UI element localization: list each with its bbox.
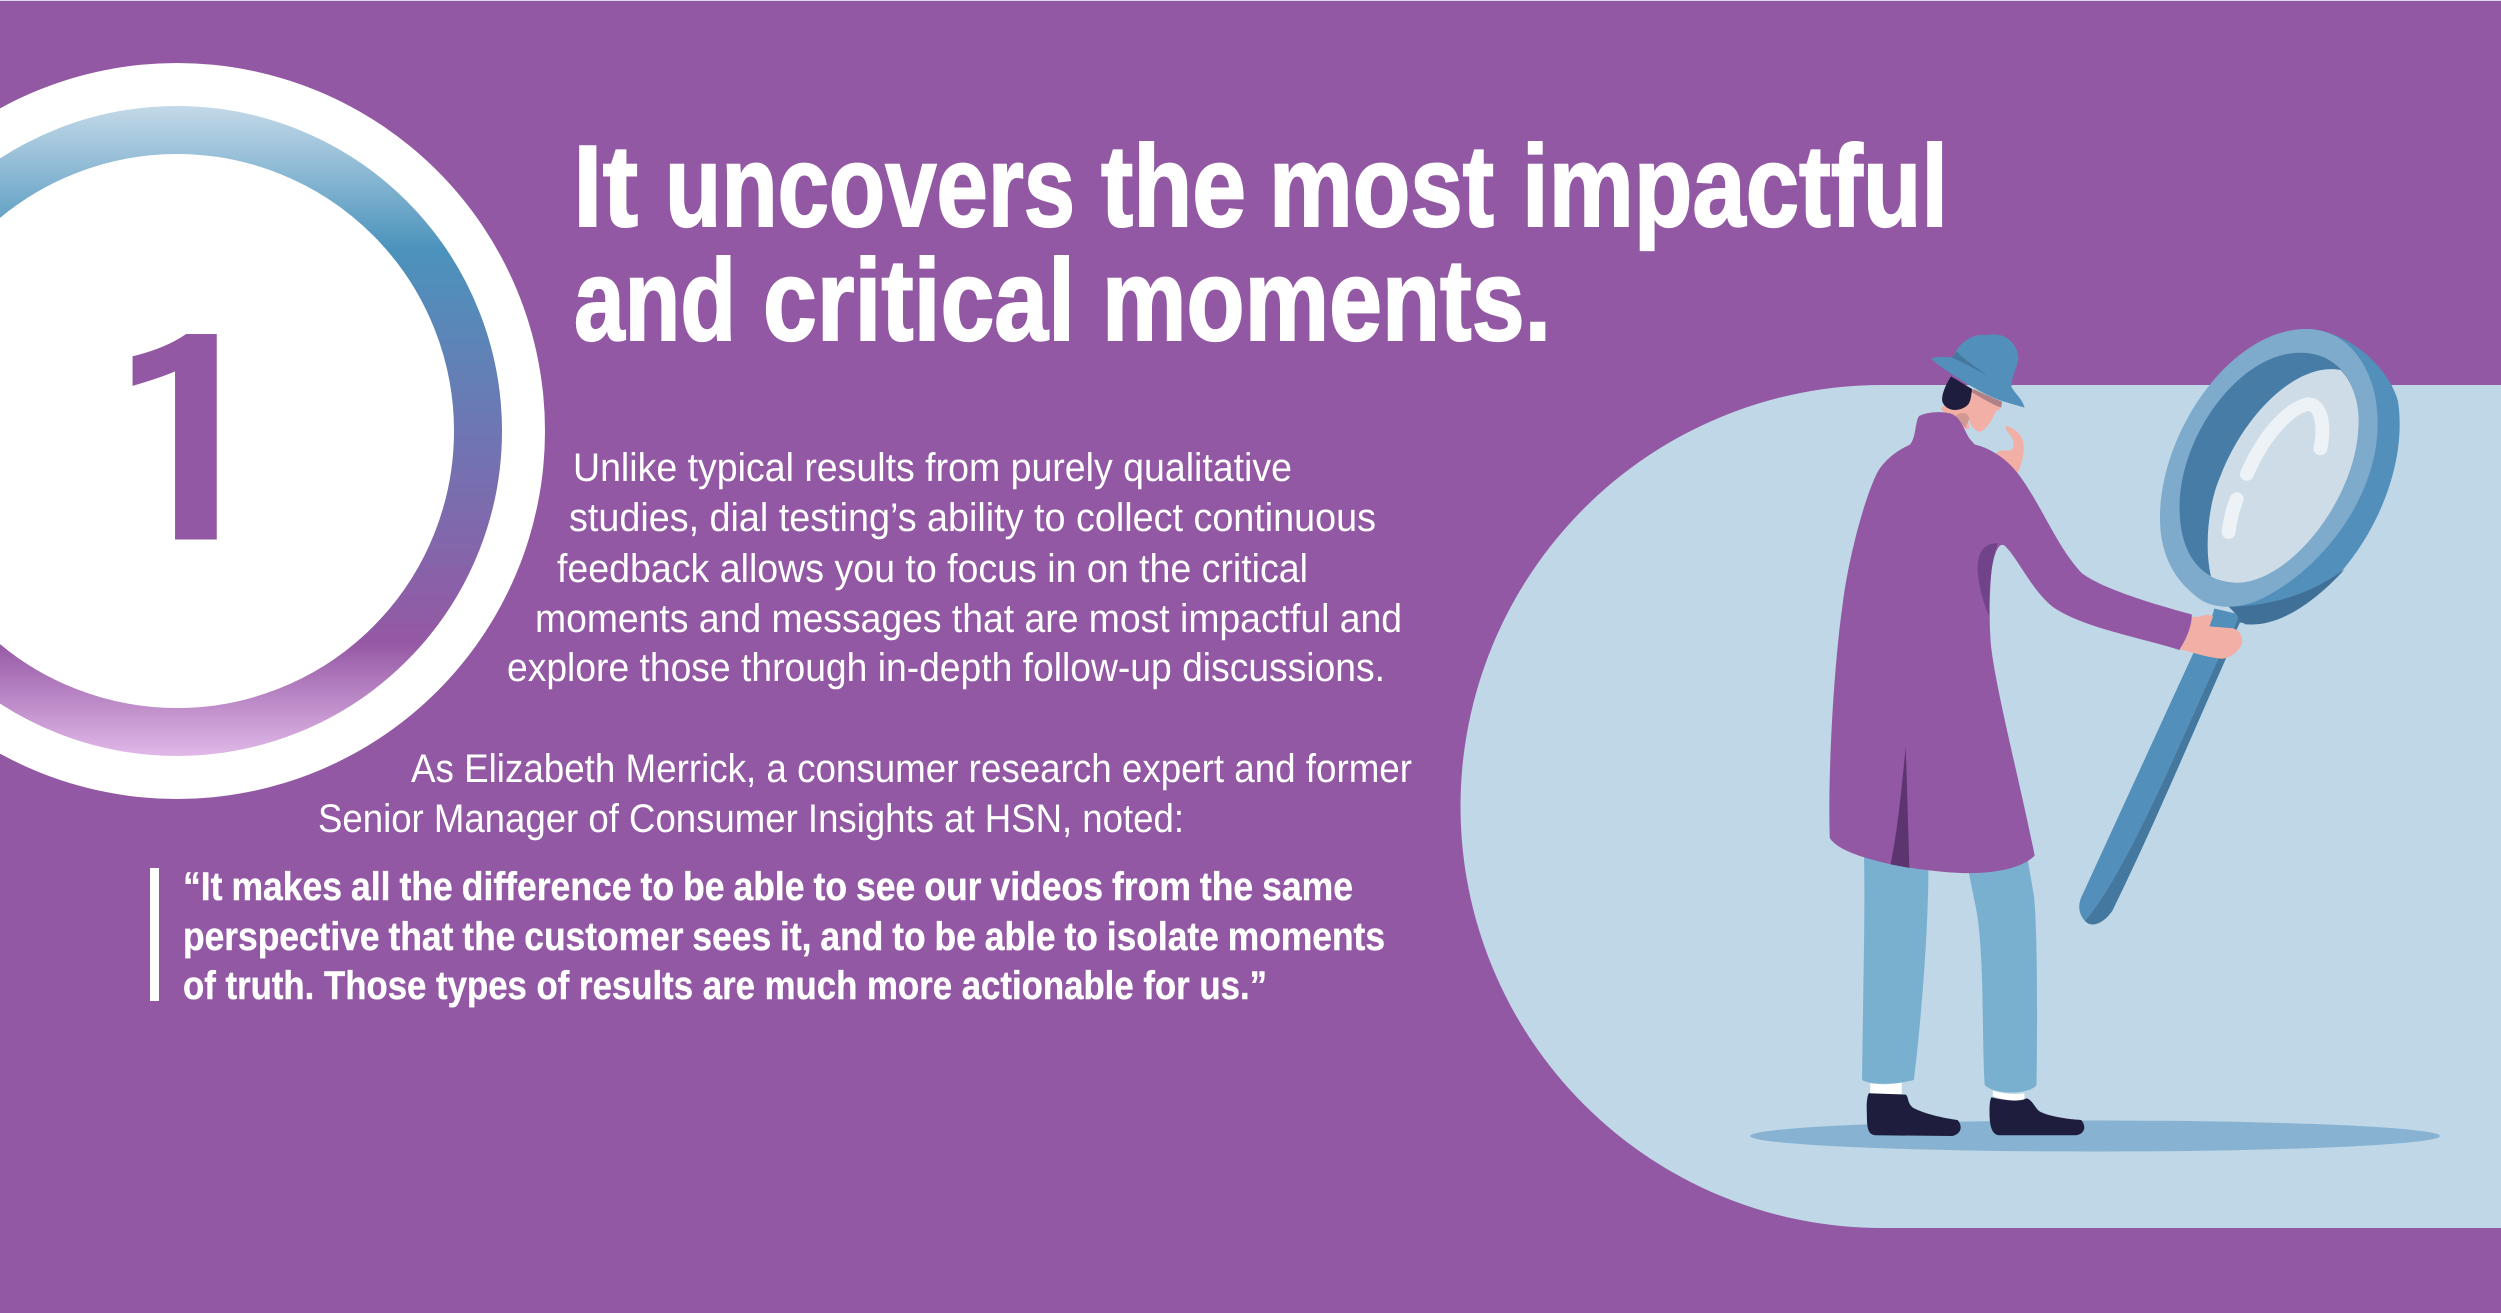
number badge [0, 63, 545, 799]
title: moments. [1102, 235, 1551, 365]
quote text: perspective that the customer sees it, and to be able to isolate moments [183, 915, 1385, 959]
title: most [1269, 121, 1494, 251]
title: the [1101, 121, 1246, 251]
head [1931, 334, 2024, 474]
quote text: “It makes all the difference to be able to see our videos from the same [183, 865, 1353, 909]
body paragraph: Unlike typical results from purely qualitative [573, 446, 1292, 490]
attribution text [318, 747, 1412, 841]
quote bar [150, 868, 159, 1001]
title: It [573, 121, 638, 251]
body paragraph: explore those through in-depth follow-up discussions. [507, 646, 1385, 690]
body paragraph: feedback allows you to focus in on the critical [557, 547, 1308, 591]
title: uncovers [665, 121, 1075, 251]
title: and [574, 235, 736, 365]
panel: light blue rounded backdrop [1460, 385, 2501, 1228]
magnifier handle [2079, 609, 2243, 925]
title: impactful [1522, 121, 1948, 251]
figure and magnifying glass [1829, 329, 2400, 925]
badge: white disc [0, 63, 545, 799]
attribution text: Senior Manager of Consumer Insights at HSN, noted: [318, 797, 1184, 841]
magnifier head [2160, 329, 2400, 625]
coat [1829, 412, 2192, 873]
badge: numeral 1: 1 [89, 301, 291, 586]
attribution text: As Elizabeth Merrick, a consumer research expert and former [411, 747, 1412, 791]
title [573, 121, 1948, 365]
quote text: of truth. Those types of results are much more actionable for us.” [183, 964, 1267, 1008]
body paragraph [507, 446, 1402, 690]
title: critical [763, 235, 1075, 365]
quote text [183, 865, 1385, 1008]
hand gripping handle [2180, 614, 2242, 659]
body paragraph: studies, dial testing’s ability to collect continuous [569, 496, 1376, 540]
legs and shoes [1862, 857, 2084, 1136]
body paragraph: moments and messages that are most impactful and [535, 597, 1402, 641]
illustration: detective with magnifying glass [1750, 329, 2440, 1152]
ground shadow [1750, 1120, 2440, 1152]
badge: gradient ring [0, 130, 478, 732]
